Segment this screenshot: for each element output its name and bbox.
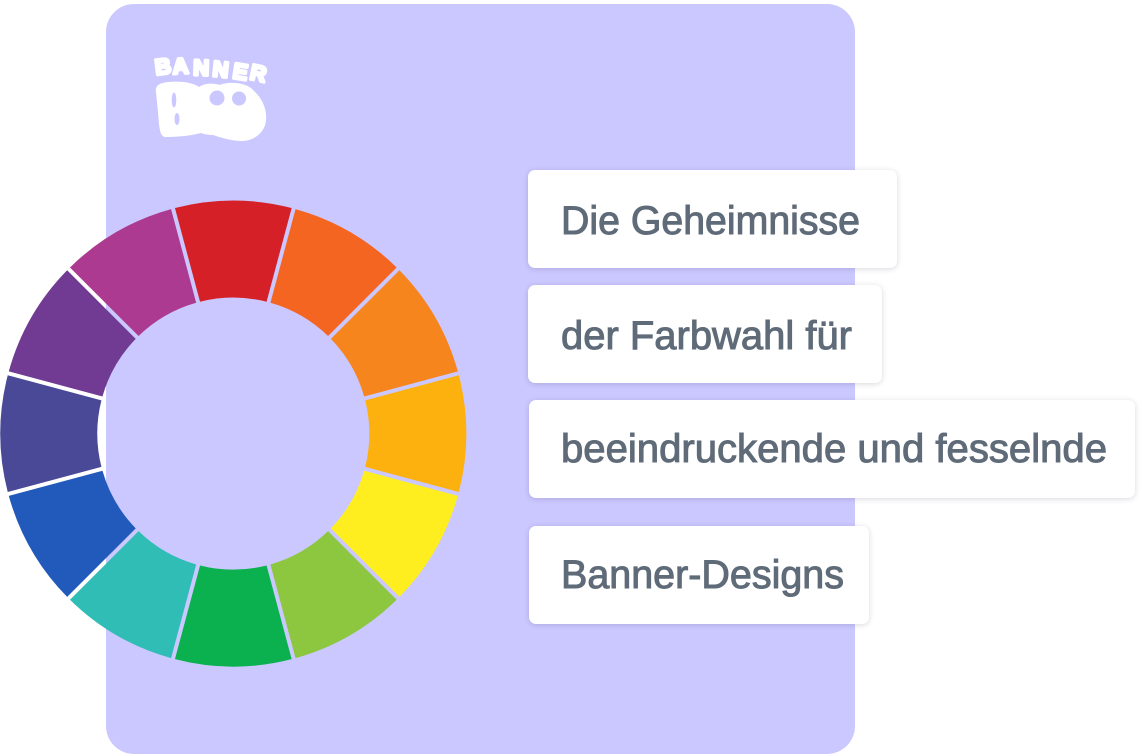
title card 4 [529, 526, 869, 624]
segment: red-orange [249, 203, 400, 349]
title card 1 [528, 170, 897, 268]
segment: orange [318, 267, 464, 418]
title card 2 [528, 285, 882, 383]
colour wheel [0, 200, 466, 667]
title card 2: der Farbwahl für [561, 314, 852, 358]
segment: green [175, 565, 292, 667]
title card 4: Banner-Designs [561, 553, 844, 597]
segment: blue [2, 449, 148, 601]
title card 1: Die Geheimnisse [561, 199, 860, 243]
logo word: BANNER: N [193, 55, 210, 81]
segment: teal [66, 519, 218, 665]
logo: BannerBoo [154, 53, 269, 148]
title card 3 [529, 400, 1135, 498]
segment: yellow [318, 449, 464, 601]
segment: magenta [66, 203, 218, 349]
segment: lime [249, 519, 400, 665]
segment: red [175, 201, 292, 302]
segment: indigo [0, 375, 101, 492]
segment: purple [2, 267, 148, 418]
segment: amber [365, 375, 466, 492]
logo word: BANNER: B [154, 53, 172, 80]
title card 3: beeindruckende und fesselnde [561, 427, 1107, 471]
logo word: BANNER [154, 53, 269, 87]
logo word: BANNER: A [172, 53, 189, 79]
logo word: BANNER: N [211, 56, 230, 83]
logo word: BANNER: E [231, 58, 250, 85]
background panel [106, 4, 855, 754]
logo word: BANNER: R [248, 59, 269, 87]
